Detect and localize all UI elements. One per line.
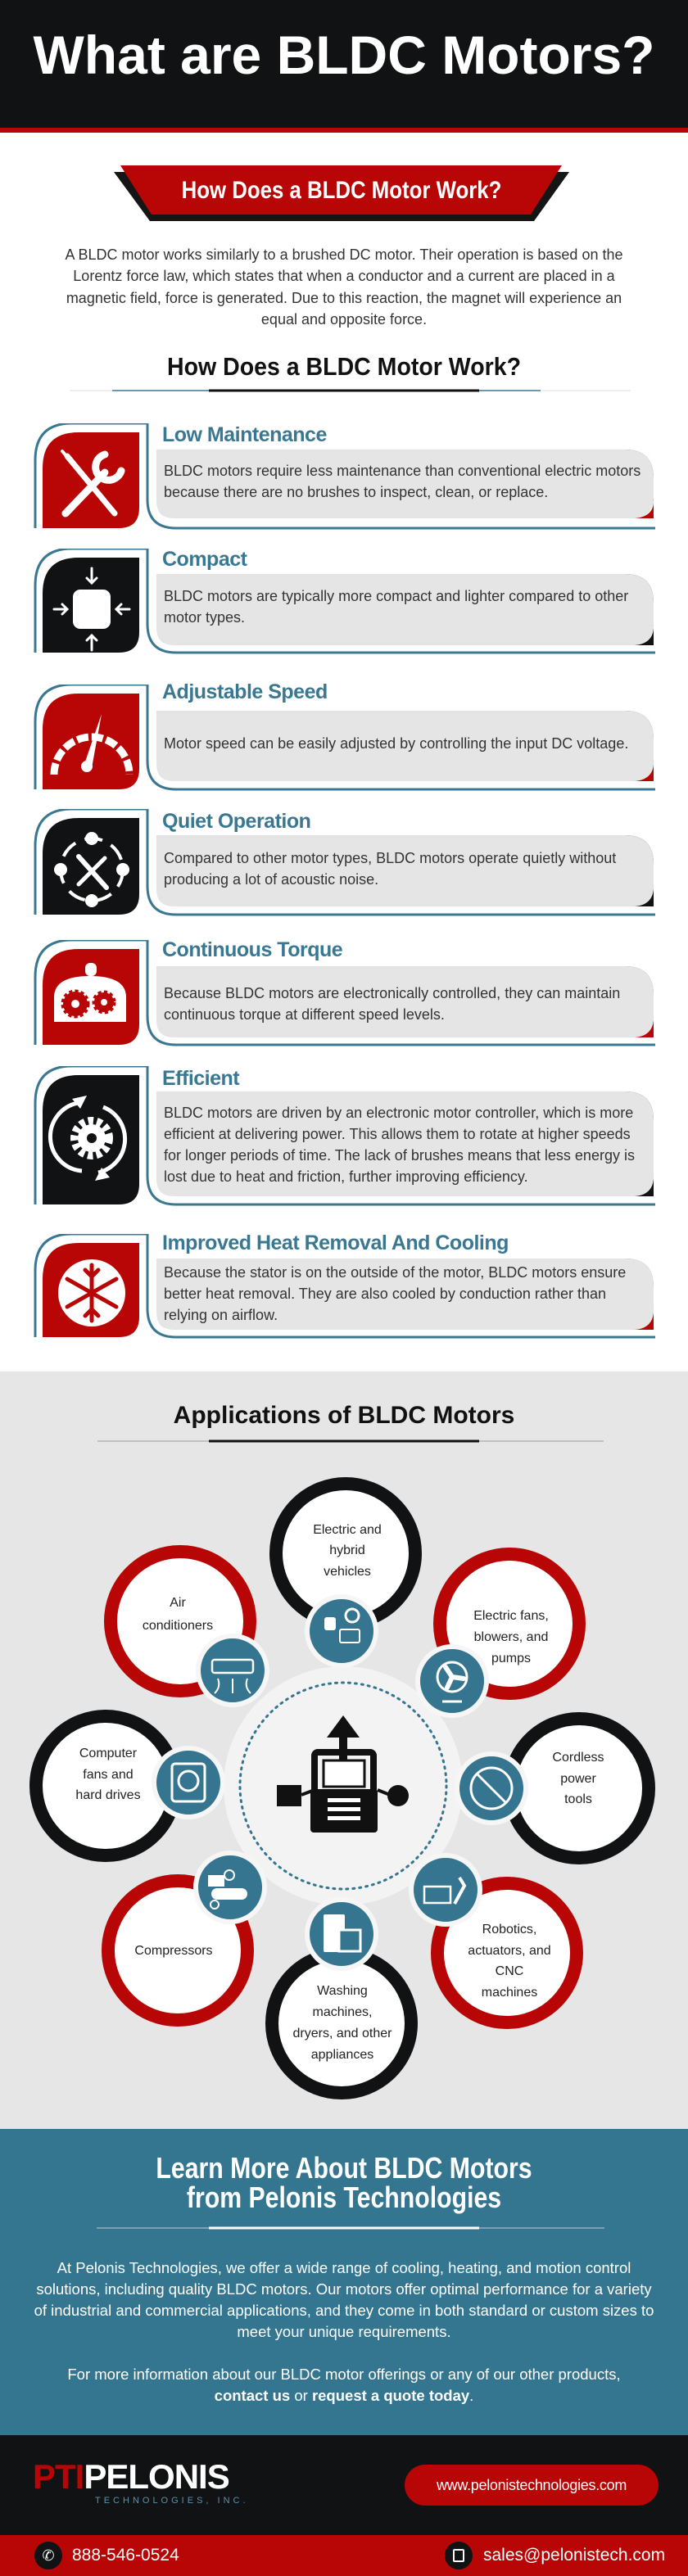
app: electric fans: blowers, and [474, 1630, 548, 1644]
icon: email [445, 2542, 473, 2569]
app: electric fans [418, 1554, 579, 1715]
app: washing machines: dryers, and other [293, 2027, 392, 2040]
app: air conditioners: Air [170, 1596, 186, 1610]
text: continuous torque: Because BLDC motors are electronically controlled, they can maintain [164, 985, 620, 1001]
text: learn more paragraph: of industrial and commercial applications, and they come in both standard or custom sizes to [34, 2302, 654, 2319]
text: learn more paragraph: At Pelonis Technologies, we offer a wide range of cooling, heating, and motion control [57, 2259, 631, 2276]
text: efficient: BLDC motors are driven by an electronic motor controller, which is more [164, 1105, 633, 1121]
center hub [224, 1666, 463, 1905]
panel: learn more [0, 2129, 688, 2435]
text: compact: motor types. [164, 609, 245, 626]
ribbon banner: How Does a BLDC Motor Work? [182, 177, 501, 204]
heading: learn more [156, 2151, 532, 2214]
app: robotics [411, 1855, 577, 2022]
intro text: Lorentz force law, which states that when a conductor and a current are placed in a [73, 268, 615, 284]
header [0, 0, 688, 133]
intro text: equal and opposite force. [261, 311, 427, 328]
text: heat removal: Because the stator is on the outside of the motor, BLDC motors ensure [164, 1264, 626, 1281]
text: continuous torque [164, 985, 620, 1023]
text: adjustable speed: Motor speed can be easily adjusted by controlling the input DC voltage. [164, 735, 628, 752]
title: quiet operation: Quiet Operation [162, 810, 310, 833]
text: learn more paragraph: solutions, including quality BLDC motors. Our motors offer optimal performance for a variety [36, 2280, 652, 2298]
text: efficient: efficient at delivering power. This allows them to rotate at higher speeds [164, 1126, 631, 1142]
text: efficient: for longer periods of time. The lack of brushes means that less energy is [164, 1147, 635, 1164]
text: quiet operation [164, 850, 616, 888]
panel: applications [0, 1372, 688, 2129]
logo: TECHNOLOGIES, INC. [95, 2496, 249, 2506]
icon: compact [43, 558, 139, 653]
intro text [66, 246, 622, 328]
text: low maintenance: BLDC motors require less maintenance than conventional electric motors [164, 463, 640, 479]
app: washing machines: machines, [313, 2005, 372, 2019]
app: cordless tools: power [560, 1772, 596, 1786]
applications diagram [29, 1477, 655, 2099]
title: compact: Compact [162, 548, 247, 571]
heading: learn more: Learn More About BLDC Motors [156, 2151, 532, 2185]
text: compact [164, 588, 628, 626]
text: phone: 888-546-0524 [72, 2546, 179, 2565]
text: heat removal: better heat removal. They are also cooled by conduction rather than [164, 1286, 606, 1302]
button: website: www.pelonistechnologies.com [437, 2477, 627, 2493]
feature: adjustable speed [34, 680, 655, 791]
icon: snowflake [43, 1243, 139, 1337]
text: learn more paragraph: meet your unique requirements. [237, 2323, 451, 2340]
app: cordless tools: Cordless [552, 1751, 604, 1765]
icon: gauge [43, 694, 139, 789]
app: electric vehicles [276, 1484, 415, 1665]
icon: torque gears [43, 949, 139, 1045]
text: low maintenance: because there are no brushes to inspect, clean, or replace. [164, 484, 548, 500]
text: quiet operation: producing a lot of acoustic noise. [164, 871, 378, 888]
feature: low maintenance [34, 423, 655, 529]
feature: efficient [34, 1066, 655, 1205]
app: computer fans: Computer [79, 1747, 138, 1760]
intro text: A BLDC motor works similarly to a brushed DC motor. Their operation is based on the [66, 246, 622, 263]
app: washing machines: appliances [311, 2048, 373, 2062]
app: electric vehicles: vehicles [324, 1565, 371, 1579]
icon: quiet [43, 818, 139, 915]
text: efficient: lost due to heat and friction, further improving efficiency. [164, 1168, 528, 1185]
app: air conditioners: conditioners [143, 1619, 213, 1633]
app: cordless tools [457, 1719, 649, 1858]
app: electric fans: pumps [491, 1652, 531, 1665]
app: computer fans [36, 1716, 223, 1855]
text: contact paragraph: For more information about our BLDC motor offerings or any of our other products, [67, 2366, 621, 2383]
app: compressors: Compressors [134, 1944, 213, 1958]
app: air conditioners [111, 1552, 267, 1705]
text: continuous torque: continuous torque at different speed levels. [164, 1006, 445, 1023]
app: washing machines: Washing [317, 1984, 368, 1998]
title: continuous torque: Continuous Torque [162, 938, 342, 961]
feature: compact [34, 548, 655, 653]
app: electric vehicles: Electric and [313, 1523, 382, 1537]
intro text: magnetic field, force is generated. Due to this reaction, the magnet will experience an [66, 290, 622, 306]
app: computer fans: hard drives [75, 1788, 141, 1802]
app: robotics: Robotics, [482, 1923, 536, 1937]
title: adjustable speed: Adjustable Speed [162, 680, 328, 703]
app: robotics: machines [482, 1986, 537, 2000]
contact bar [0, 2535, 688, 2576]
app: cordless tools: tools [564, 1792, 592, 1806]
text: efficient [164, 1105, 635, 1185]
title: What are BLDC Motors? [33, 25, 655, 85]
text: heat removal [164, 1264, 626, 1323]
text: contact paragraph: contact us or request a quote today. [215, 2387, 473, 2404]
icon: efficient gear [43, 1075, 139, 1204]
feature: continuous torque [34, 938, 655, 1046]
heading: how does it work: How Does a BLDC Motor Work? [167, 352, 521, 381]
text: email: sales@pelonistech.com [483, 2546, 665, 2565]
icon: phone: ✆ [42, 2547, 55, 2564]
icon: wrench and screwdriver [43, 432, 139, 528]
title: low maintenance: Low Maintenance [162, 423, 327, 446]
text: compact: BLDC motors are typically more compact and lighter compared to other [164, 588, 628, 604]
heading: applications: Applications of BLDC Motors [174, 1402, 514, 1429]
text: heat removal: relying on airflow. [164, 1307, 278, 1323]
title: efficient: Efficient [162, 1067, 239, 1090]
app: electric fans: Electric fans, [473, 1609, 549, 1623]
logo: PTIPELONIS [33, 2457, 229, 2496]
text: low maintenance [164, 463, 640, 500]
feature: quiet operation [34, 809, 655, 915]
feature: heat removal [34, 1232, 655, 1338]
app: computer fans: fans and [83, 1768, 134, 1782]
text: quiet operation: Compared to other motor types, BLDC motors operate quietly without [164, 850, 616, 866]
footer [0, 2435, 688, 2535]
heading: learn more: from Pelonis Technologies [187, 2181, 501, 2214]
icon: phone [34, 2542, 62, 2569]
app: electric vehicles: hybrid [329, 1543, 365, 1557]
ribbon banner [114, 165, 569, 221]
text: learn more paragraph [34, 2259, 654, 2340]
button: website [405, 2465, 659, 2506]
text: contact paragraph [67, 2366, 621, 2404]
app: robotics: CNC [496, 1964, 523, 1978]
app: washing machines [272, 1900, 411, 2093]
app: compressors [108, 1853, 265, 2020]
title: heat removal: Improved Heat Removal And Cooling [162, 1232, 509, 1254]
app: robotics: actuators, and [468, 1944, 551, 1958]
